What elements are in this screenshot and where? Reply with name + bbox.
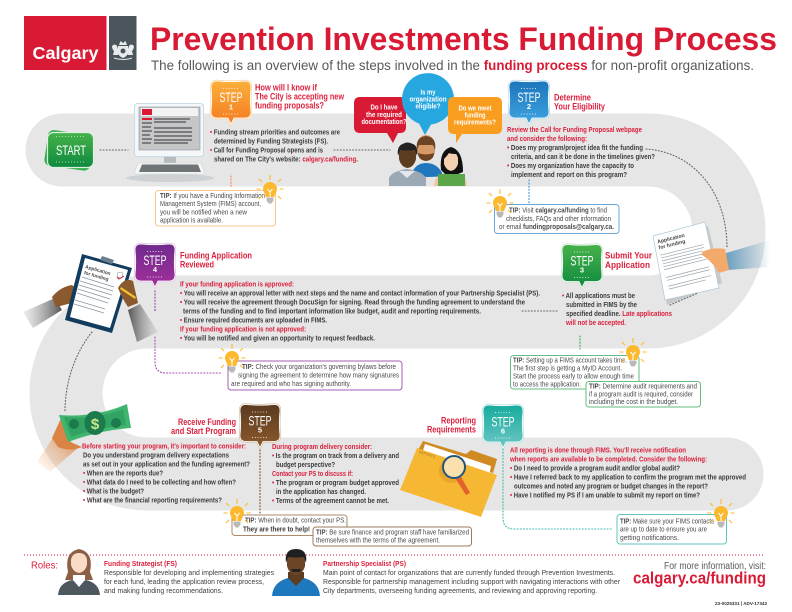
step 1 text: determined by Funding Strategists (FS).	[214, 136, 328, 146]
step 6 badge	[483, 405, 523, 448]
step 2 heading	[554, 92, 605, 112]
step 3 badge: STEP	[570, 254, 594, 268]
logo: Calgary	[32, 43, 99, 63]
speech bubble: eligible: Is my	[420, 88, 436, 96]
tip 2: or email fundingproposals@calgary.ca.	[499, 222, 614, 231]
clipboard with hands: Application	[84, 264, 111, 277]
step 1 badge	[211, 81, 251, 124]
step 5 right text: • Terms of the agreement cannot be met.	[272, 496, 389, 505]
step 5 right text: During program delivery consider:	[272, 442, 372, 451]
tip 1: Management System (FIMS) account,	[160, 199, 261, 208]
tip 3b	[586, 382, 700, 407]
partnership specialist text: Responsible for partnership management including support with navigating interactions with other	[323, 577, 620, 586]
step 4 text: • Ensure required documents are uploaded in FIMS.	[180, 316, 327, 324]
step 4 text: • You will receive an approval letter with next steps and the name and contact information of your Partnership Specialist (PS).	[180, 288, 540, 298]
step 4 text: If your funding application is not approved:	[180, 324, 306, 334]
step 6 badge: 6	[501, 426, 505, 436]
speech bubble: eligible	[402, 73, 454, 135]
step 1 text	[210, 128, 358, 164]
step 6 heading	[427, 416, 476, 434]
application document with hand: Application	[657, 233, 685, 245]
money with hand	[37, 404, 131, 472]
step 4 badge: 4	[153, 265, 158, 274]
tip 3: Start the process early to allow enough time	[513, 372, 634, 380]
step 2 badge	[509, 81, 549, 124]
tip 6	[617, 499, 734, 544]
tip 4: are required and who has signing authority.	[231, 379, 351, 388]
step 5 left text	[82, 442, 250, 504]
step 1 text: • Call for Funding Proposal opens and is	[210, 146, 323, 154]
tip 6: TIP: Make sure your FIMS contacts	[620, 516, 714, 526]
tip 2	[486, 189, 619, 234]
roles label: Roles:	[31, 560, 58, 572]
step 5 badge: STEP	[248, 414, 272, 428]
step 3 text: submitted in FIMS by the	[566, 300, 637, 309]
document code: 23-0025331 | ADV-17343	[715, 601, 767, 606]
tip 5: TIP: When in doubt, contact your PS.	[245, 516, 346, 524]
speech bubble: documentation: Do I have	[370, 102, 398, 112]
step 1 text: shared on The City's website: calgary.ca/funding.	[214, 154, 358, 164]
speech bubble: eligible: eligible?	[416, 102, 440, 110]
step 4 text: If your funding application is approved:	[180, 280, 294, 288]
application document with hand: for funding	[658, 239, 686, 251]
start badge	[44, 129, 94, 171]
step 5 badge: 5	[258, 426, 262, 434]
application document with hand	[653, 222, 770, 305]
step 6 badge: STEP	[492, 414, 514, 430]
step 3 badge: 3	[580, 266, 584, 274]
tip 4	[218, 344, 402, 390]
step 6 text	[509, 446, 746, 500]
clipboard with hands	[23, 254, 158, 342]
partnership specialist text: City departments, overseeing funding agreements, and reviewing and approving reporting.	[323, 586, 597, 595]
step 2 badge: STEP	[518, 90, 540, 105]
step 4 heading: Funding Application	[180, 250, 252, 260]
step 5 left text: as set out in your application and the funding agreement?	[83, 460, 250, 468]
more information link: calgary.ca/funding	[633, 568, 766, 588]
step 4 badge	[135, 244, 175, 287]
icon: computer	[126, 104, 214, 182]
funding strategist text: for each fund, leading the application review process,	[104, 577, 264, 586]
tip 2: TIP: Visit calgary.ca/funding to find	[509, 206, 607, 214]
step 2 text: • Does my program/project idea fit the funding	[507, 143, 643, 152]
step 4 text	[180, 280, 540, 342]
step 2 text: Review the Call for Funding Proposal webpage	[507, 125, 642, 134]
tip 3b: including the cost in the budget.	[589, 397, 678, 406]
step 3 text	[562, 291, 672, 327]
step 5 right text: • Is the program on track from a delivery and	[272, 451, 399, 460]
money with hand: $	[91, 416, 100, 433]
speech bubble: documentation	[354, 97, 406, 143]
speech bubble: requirements: funding	[464, 110, 486, 120]
more information link: For more information, visit:	[664, 561, 766, 572]
dark man	[389, 169, 426, 186]
step 6 heading: Requirements	[427, 424, 476, 434]
step 2 heading: Determine	[554, 92, 591, 102]
step 3 heading	[605, 250, 652, 270]
step 6 text: • Have I notified my PS if I am unable to submit my report on time?	[510, 490, 700, 500]
step 4 text: terms of the funding and to find important information like budget, audit and reporting requirements.	[183, 306, 481, 316]
partnership specialist text: Main point of contact for organizations that are currently funded through Prevention Investments.	[323, 568, 615, 577]
road band	[62, 150, 729, 474]
step 6 text: All reporting is done through FIMS. You'll receive notification	[510, 446, 686, 454]
step 5 left text: Do you understand program delivery expectations	[83, 450, 229, 460]
speech bubble: documentation: documentation?	[362, 117, 406, 126]
step 5 left text: • When are the reports due?	[83, 468, 163, 478]
step 1 badge: STEP	[220, 90, 242, 105]
tip 6: getting notifications.	[620, 533, 679, 542]
step 5 right text	[272, 442, 399, 505]
step 3 text: will not be accepted.	[565, 318, 626, 327]
step 5 left text: • What data do I need to be collecting and how often?	[83, 478, 236, 486]
step 2 text: implement and report on this program?	[511, 170, 627, 179]
step 5 heading: Receive Funding	[178, 417, 236, 427]
tip 3b: if a program audit is required, consider	[589, 390, 693, 398]
more information link	[633, 561, 766, 588]
step 2 badge: 2	[527, 102, 531, 111]
bearded man	[411, 163, 443, 177]
tip 1: application is available.	[160, 216, 223, 224]
step 3 heading: Application	[605, 260, 650, 270]
woman	[441, 147, 463, 174]
step 4 text: • You will be notified and given an opportunity to request feedback.	[180, 334, 375, 342]
tip 3b: TIP: Determine audit requirements and	[589, 382, 697, 390]
step 4 heading: Reviewed	[180, 260, 214, 270]
tip 5	[224, 499, 347, 536]
tip 3	[510, 338, 646, 389]
step 4 badge: STEP	[144, 253, 166, 268]
step 3 text: • All applications must be	[562, 291, 635, 300]
funding strategist text: and making funding recommendations.	[104, 586, 223, 595]
subtitle: The following is an overview of the steps involved in the funding process for non-profit organizations.	[151, 57, 754, 73]
tip 6: are up to date to ensure you are	[620, 524, 707, 534]
speech bubble: requirements	[448, 97, 502, 143]
tip 3: to access the application.	[513, 380, 581, 388]
tip 5: They are there to help!	[243, 524, 310, 534]
speech bubble: documentation: the required	[366, 110, 402, 119]
step 1 heading: The City is accepting new	[255, 92, 345, 102]
tip 5b: themselves with the terms of the agreement.	[316, 536, 440, 544]
step 4 text: • You will receive the agreement through DocuSign for signing. Read through the funding agreement to understand the	[180, 298, 525, 306]
funding strategist text: Responsible for developing and implementing strategies	[104, 568, 274, 577]
step 5 right text: Contact your PS to discuss if:	[272, 469, 353, 478]
step 1 heading: funding proposals?	[255, 100, 324, 110]
step 6 text: • Do I need to provide a program audit and/or global audit?	[510, 464, 680, 472]
tip 3: TIP: Setting up a FIMS account takes time.	[513, 356, 627, 364]
step 2 text: criteria, and can it be done in the timelines given?	[511, 152, 655, 161]
step 1 heading: How will I know if	[255, 82, 318, 92]
step 6 text: outcomes and noted any program or budget changes in the report?	[514, 482, 708, 490]
step 5 heading: and Start Program	[171, 426, 236, 436]
speech bubble: requirements: requirements?	[454, 118, 496, 126]
step 6 heading: Reporting	[441, 416, 476, 426]
step 2 heading: Your Eligibility	[554, 102, 605, 112]
tip 5b: TIP: Be sure finance and program staff have familiarized	[316, 528, 469, 536]
step 3 text: specified deadline. Late applications	[566, 309, 672, 318]
step 5 left text: • What are the financial reporting requirements?	[83, 496, 222, 504]
tip 1: you will be notified when a new	[160, 208, 248, 216]
tip 4: signing the agreement to determine how many signatures	[238, 370, 399, 380]
tip 1: TIP: If you have a Funding Information	[160, 191, 265, 200]
tip 1	[156, 175, 284, 226]
speech bubble: requirements: Do we meet	[458, 104, 492, 112]
step 5 left text: Before starting your program, it's important to consider:	[82, 442, 246, 450]
start badge: START	[56, 143, 86, 158]
step 2 text	[507, 125, 655, 179]
step 2 text: and consider the following:	[507, 134, 587, 143]
speech bubble: eligible: organization	[410, 94, 446, 104]
partnership specialist text	[323, 559, 620, 595]
step 6 text: when reports are available to be completed. Consider the following:	[509, 454, 707, 464]
tip 4: TIP: Check your organization's governing bylaws before	[242, 362, 396, 371]
step 5 badge	[240, 404, 280, 448]
tip 3: The first step is getting a MyID Account.	[513, 364, 622, 372]
title: Prevention Investments Funding Process	[150, 21, 777, 57]
step 1 badge: 1	[229, 102, 233, 112]
step 5 right text: in the application has changed.	[276, 487, 366, 496]
tip 5b	[313, 527, 472, 546]
icon: funding strategist	[58, 549, 100, 595]
logo	[24, 16, 136, 70]
step 3 badge	[562, 244, 602, 288]
people with speech bubbles	[354, 73, 502, 186]
step 5 heading	[171, 417, 236, 436]
step 2 text: • Does my organization have the capacity to	[507, 161, 634, 170]
step 5 left text: • What is the budget?	[83, 486, 144, 496]
step 3 heading: Submit Your	[605, 250, 652, 260]
icon: partnership specialist	[272, 549, 320, 596]
icon: folder with magnifier: REPORTS	[418, 450, 436, 459]
step 4 heading	[180, 250, 252, 270]
step 5 right text: • The program or program budget approved	[272, 478, 399, 487]
clipboard with hands: for funding	[83, 270, 109, 283]
tip 2: checklists, FAQs and other information	[506, 214, 611, 223]
step 1 text: • Funding stream priorities and outcomes are	[210, 128, 340, 136]
funding strategist text	[104, 559, 274, 595]
step 5 right text: budget perspective?	[276, 460, 335, 469]
step 1 heading	[255, 82, 345, 110]
funding strategist text: Funding Strategist (FS)	[104, 559, 177, 568]
icon: folder with magnifier	[400, 441, 497, 517]
partnership specialist text: Partnership Specialist (PS)	[323, 559, 406, 568]
